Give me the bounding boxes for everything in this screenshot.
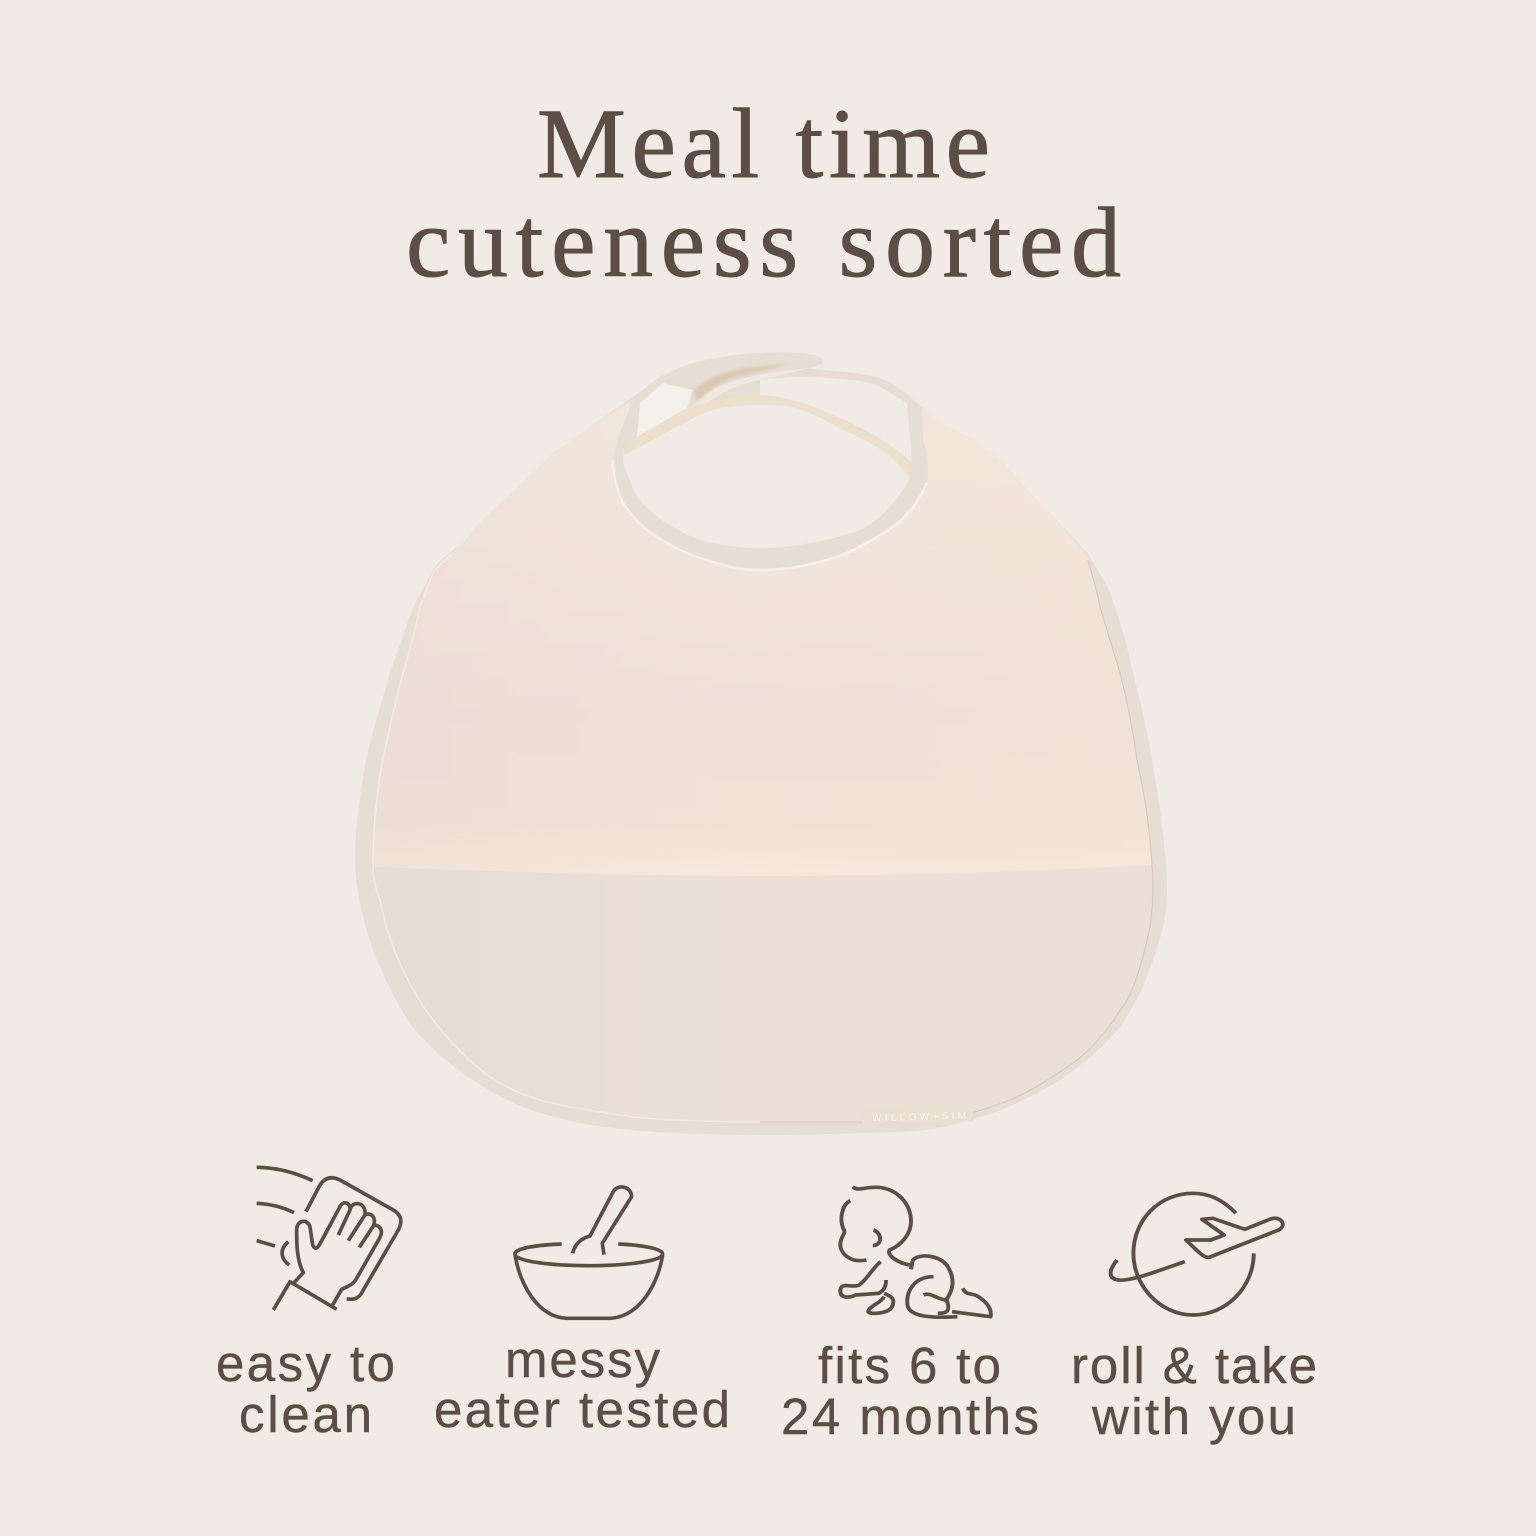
- strap inner panel left: [637, 383, 693, 437]
- feature: fits 6 to 24 months: [781, 1187, 1039, 1445]
- icon: crawling baby: [840, 1187, 991, 1317]
- feature: easy to clean: [216, 1167, 401, 1443]
- strap tan shading: [693, 364, 790, 402]
- label: fits 6 to: [818, 1337, 1001, 1394]
- strap tan underside centre: [687, 395, 760, 420]
- label: 24 months: [781, 1388, 1039, 1445]
- label: [216, 1335, 395, 1443]
- panel side tint: [373, 400, 1152, 880]
- product: bib: [355, 352, 1167, 1135]
- bib seam left: [373, 553, 760, 1122]
- feature: roll and take with you: [1071, 1193, 1317, 1445]
- strap tan underside left: [623, 408, 690, 455]
- feature: messy eater tested: [434, 1187, 730, 1438]
- icon: bowl and spoon: [515, 1187, 663, 1318]
- title: [406, 88, 1121, 298]
- label: with you: [1091, 1388, 1296, 1445]
- label: eater tested: [434, 1381, 730, 1438]
- label: easy to: [216, 1335, 395, 1392]
- strap tan underside right: [760, 395, 913, 478]
- bib seam right: [760, 560, 1153, 1123]
- care label: [862, 1104, 973, 1124]
- label: clean: [239, 1386, 372, 1443]
- label: [434, 1331, 730, 1438]
- bib binding and silhouette: [355, 352, 1167, 1135]
- label: messy: [505, 1331, 660, 1388]
- strap inner panel right: [760, 377, 912, 463]
- label: [781, 1337, 1039, 1445]
- icon: plane around globe: [1111, 1193, 1283, 1315]
- label: [1071, 1337, 1317, 1445]
- title: cuteness sorted: [406, 187, 1121, 298]
- neck stitching: [613, 460, 927, 570]
- care label: WILLOW+SIM: [872, 1111, 966, 1124]
- title: Meal time: [537, 88, 990, 199]
- icon: hand wiping with cloth: [257, 1167, 401, 1310]
- pocket: [373, 865, 1153, 1123]
- label: roll & take: [1071, 1337, 1317, 1394]
- bib front upper panel: [373, 400, 1152, 880]
- strap centre fold: [690, 368, 810, 410]
